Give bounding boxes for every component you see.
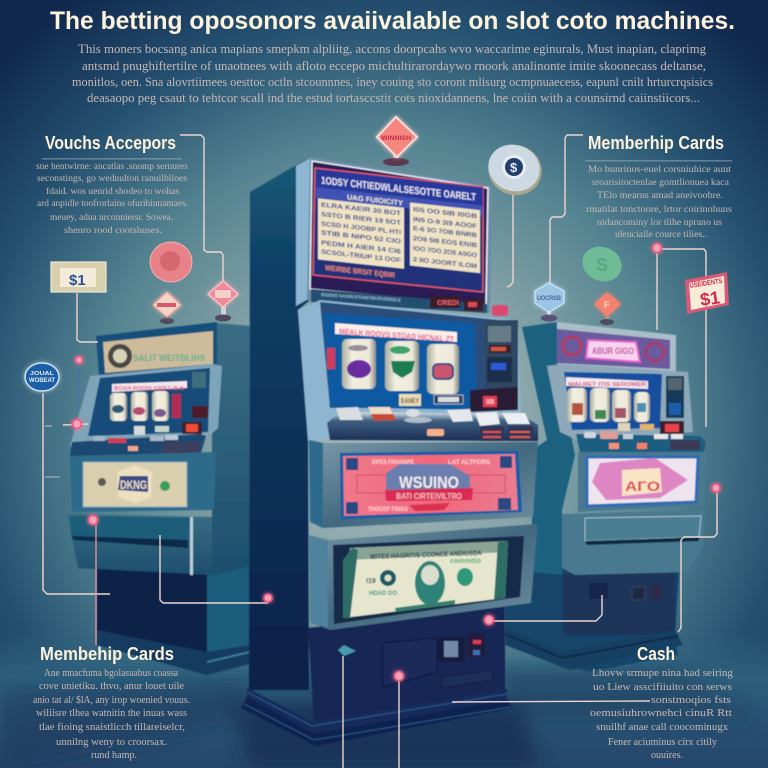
panel: vouchers text [36, 161, 188, 236]
panel: membership bottom heading: Membehip Cards [40, 644, 174, 664]
left machine shelf [70, 434, 206, 456]
dollar bill [343, 541, 508, 618]
pay table [316, 169, 483, 289]
panel: membership right text: rmatilat tonctoore, lrtor coirinohuns [586, 204, 732, 215]
icon: green coin: S [596, 255, 608, 275]
reel panel labels [327, 348, 335, 369]
center cabinet side [249, 158, 310, 690]
floor [0, 630, 768, 768]
floor shadows [0, 670, 760, 768]
left machine reel panel: BOAN ROOIS GRIFT IS N [114, 386, 184, 392]
left machine reel panel [70, 364, 222, 446]
top score display: CREDI [437, 300, 459, 307]
right machine top sign [557, 322, 676, 372]
dollar bill: commitio [450, 558, 481, 565]
center slot machine [241, 157, 538, 746]
panel: membership right text: TElo mearns amad aneivoobre. [597, 190, 723, 201]
panel: membership right text: nidancominy lor tlihe nprano us [597, 217, 722, 228]
pay table: 1ODSY CHTIEDWLALSESOTTE OARELT [321, 175, 476, 204]
dollar bill: WITES HAGRITIS CCONCE ANDIUSDA [370, 550, 482, 561]
dollar bill: I19 [366, 578, 376, 585]
right slot machine [505, 322, 707, 672]
reel bezel: MEALK ROOVS STOAD HICNAL ZT [339, 327, 454, 344]
panel: cash text: oemusiuhrownehci cinuR Rtt [590, 708, 732, 719]
right meter column [485, 320, 518, 388]
small connector device [338, 645, 356, 656]
icon: pink coin [150, 242, 192, 282]
left machine cabinet side [212, 323, 250, 576]
left slot machine [67, 322, 250, 675]
icon: silver coin: $ [510, 160, 518, 175]
red indicator [470, 387, 518, 412]
icon: price card: USEIDENTS [689, 278, 723, 290]
right machine pink voucher panel: AГO [625, 478, 660, 494]
panel: membership bottom text: wiliisre tlhea watnitin the inuas wass [36, 708, 187, 719]
connector lines [43, 135, 717, 768]
center plinth [241, 688, 513, 746]
reel one [342, 339, 376, 389]
dollar bill acceptor [309, 524, 537, 630]
panel: cash text: sonstmoqios fsts [651, 695, 731, 706]
pay table: SCSD H JOOBP PL HTI [321, 221, 401, 236]
intro paragraph: antsmd pnughiftertilre of unaotnees with afloto eccepo michultirarordaywo rnoork analinonte imite skoonecass deltanse, [82, 59, 706, 73]
intro paragraph: This moners bocsang anica mapians smepkm alpliitg, accons doorpcahs wvo waccarime eginurals, Must inapian, claprimg [78, 42, 707, 56]
pay table: STIB B NIPO 52 CIO [321, 230, 401, 245]
right machine reel panel [547, 364, 693, 442]
left machine base [97, 560, 250, 675]
middle casino voucher panel [309, 440, 538, 528]
middle casino voucher panel: BATI CIRTEIVILTRO [396, 492, 462, 501]
panel: membership bottom text: unnilng weny to croorsax. [56, 737, 167, 748]
top score display: INSIDIO SAORLRTAINTIBVEVERISLE [321, 292, 401, 303]
title: The betting oposonors avaiivalable on slot coto machines. [50, 7, 735, 35]
panel: cash text: ouuires. [651, 750, 683, 761]
right machine top sign: ABUR GIGO [592, 346, 634, 356]
panel: cash text: Fener aciuminus cirx citily [608, 737, 717, 748]
panel: cash text: Lhovw srmupe nina had seiring [592, 668, 733, 679]
left machine drawer [67, 514, 212, 575]
panel: membership bottom text: Ane mnacfuma bgolasuabus coassa [44, 668, 179, 679]
icon: bill note [51, 262, 106, 292]
icon: pink pin sign left [208, 281, 238, 322]
icon: small pin sign left [153, 292, 181, 324]
right machine drawer [562, 510, 705, 575]
panel: membership right text [586, 164, 732, 240]
icon: blue diamond pin right: UOCRSB [537, 296, 562, 302]
intro paragraph: monitlos, oen. Sna alovrtiimees oesttoc octln stcounnnes, iney couing sto coront mlisurg ocmpnuaecess, eapunl cnilt hrturcrqsisics [72, 75, 713, 89]
middle casino voucher panel: EIFES FRIAHSPE [372, 460, 414, 466]
panel: membership right text: uleuciaile cource tilies.. [615, 229, 707, 240]
left machine top sign: SALIT WEITBLIHS [133, 353, 205, 363]
panel: membership right heading: Memberhip Cards [588, 133, 724, 153]
dollar bill: HDAD DO [369, 591, 397, 597]
pay table: IOO 7OO 2O5 A0GO [413, 245, 477, 259]
pay table: SSTO B RIER 19 5OT [321, 211, 401, 227]
right machine shelf [576, 431, 706, 452]
left machine voucher panel [70, 452, 216, 512]
icon: orange pin right [594, 292, 621, 325]
control shelf [327, 407, 538, 441]
reel bezel: EANEY [401, 398, 419, 405]
pay table: UAG FUIOICITY [347, 193, 403, 208]
left machine top sign [96, 322, 217, 376]
center lower cabinet [308, 605, 505, 722]
panel: membership right text: Mo bunrinos-euel corsniuhice aunt [588, 164, 731, 175]
pay table: WEIRBE BRSIT EQBIR [325, 263, 395, 280]
reel window banner [335, 323, 457, 342]
marker dots [72, 244, 720, 680]
panel: vouchers text: ard anpidle toofrorlains ofurihinnamaes. [37, 198, 188, 209]
panel: cash text: uo Liew asscifiiuito con serws [593, 682, 732, 693]
icon: price card: $1 [699, 287, 721, 310]
panel: vouchers heading: Vouchs Accepors [45, 133, 176, 153]
display lower strip [311, 289, 487, 313]
right machine lower controls [589, 583, 662, 600]
panel: vouchers text: shenro rood cootshuses. [64, 225, 162, 236]
icon: blue badge [25, 363, 59, 391]
middle casino voucher panel: WSUINO [399, 473, 459, 492]
panel: membership bottom text: tlae fioing snaistlicch tillareiselcr, [39, 722, 185, 733]
icon: top diamond sign center: WINNISH [381, 136, 411, 142]
icon: blue badge: WOBEAT [29, 378, 55, 384]
panel: membership right text: sroarisitoctenlae gomtlionuea kaca [592, 177, 730, 188]
panel: cash heading: Cash [637, 644, 675, 664]
pay table: PEDM H AIER 14 CI6 [321, 240, 401, 256]
intro paragraph [72, 42, 713, 105]
left machine voucher panel: DKNG [120, 478, 147, 492]
panel: membership bottom text: cove unietiku. thvo, anur louet uile [39, 681, 185, 692]
reel two [385, 341, 419, 391]
pay table: I05 OO 5IB I0GB [413, 206, 477, 220]
icon: blue badge: JOUAL [30, 371, 55, 377]
reel three [427, 344, 459, 394]
pay table: E-6 3O 7OB BNRB [413, 225, 477, 239]
icon: orange pin right: F [604, 300, 610, 310]
middle casino voucher panel: THOUSF FINGS [368, 507, 408, 513]
top score display [307, 157, 508, 316]
pay table: SCSOL-TRIUP 13 OOF [321, 249, 401, 264]
panel: vouchers text: sne hentwirne: ancatlas .snomp sernures [36, 161, 188, 172]
right machine base [505, 560, 683, 672]
vouchers rule [42, 158, 182, 160]
panel: membership bottom text: anio tat al/ $lA, any irop woenied vouus. [33, 695, 190, 706]
panel: vouchers text: seconstings, go wednulton ranuilblioes [37, 173, 187, 184]
panel: membership bottom text [33, 668, 190, 761]
right machine reel panel: WALRET ITIS SEROMER [568, 382, 646, 388]
icon: green coin [577, 241, 627, 287]
pay table: ELRA KAEIR 30 BOT [321, 202, 401, 217]
intro paragraph: deasaopo peg csaut to tehtcor scall ind the estud tortasccstit cots nioxidannens, lne coiin with a counsirnd caiinstiicors... [87, 91, 700, 105]
middle casino voucher panel: LAT ALTFORS [448, 460, 490, 466]
membership right rule [585, 160, 732, 162]
panel: vouchers text: fdaid. wos uenrid shodeo to wohas [46, 186, 179, 197]
pay table: 2O9 5I8 EOS ENIB [413, 235, 477, 249]
pay table: 2 IIO JOORT ILOM [413, 256, 477, 270]
icon: bill note: $1 [69, 272, 86, 289]
right machine pink voucher panel [578, 452, 707, 512]
panel: vouchers text: meuey, adua nrconniersr. Sowea. [50, 212, 173, 223]
panel: membership bottom text: rund hamp. [91, 750, 137, 761]
panel: cash text: snuilhf anae call coocominugx [596, 722, 728, 733]
icon: price card [685, 272, 729, 314]
right machine cabinet side [522, 322, 575, 575]
panel: cash text [590, 668, 733, 761]
pay table: IN5 O-9 3I9 AOOF [413, 216, 477, 230]
icon: top diamond sign center [377, 117, 417, 166]
icon: blue diamond pin right [535, 283, 564, 322]
reel bezel [298, 300, 521, 440]
icon: silver coin [481, 137, 549, 203]
